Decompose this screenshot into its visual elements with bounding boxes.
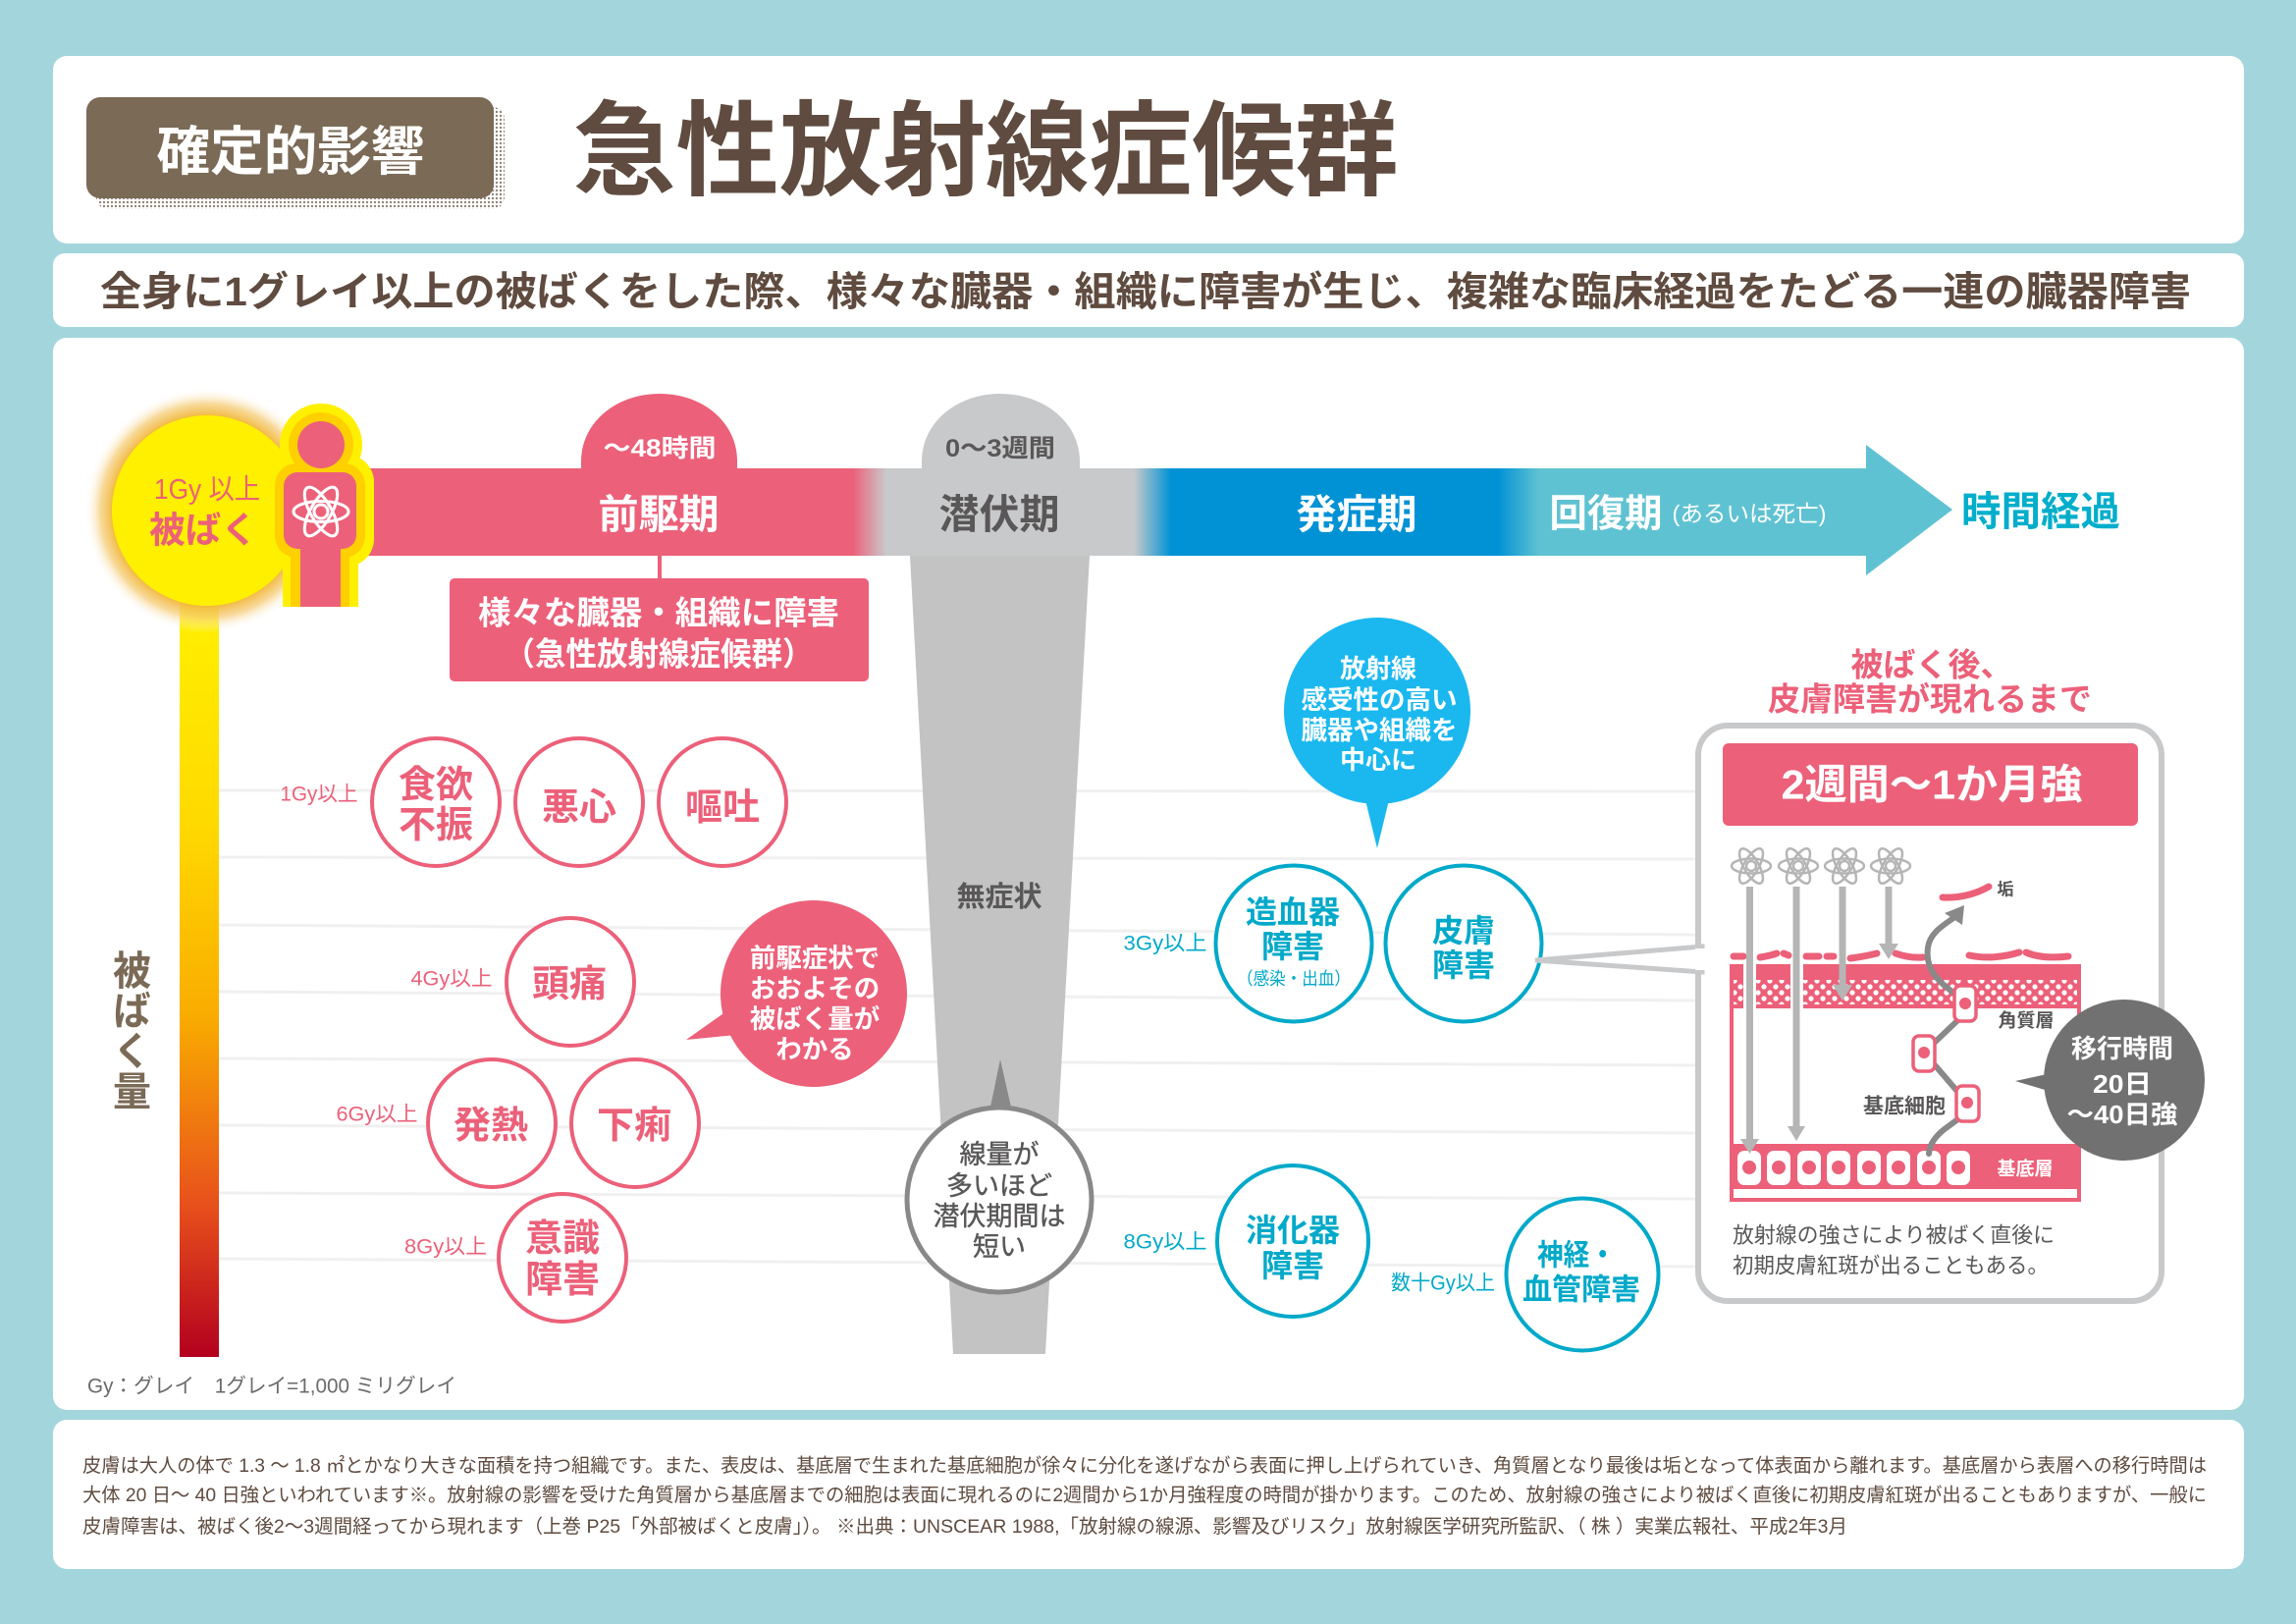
- dose label: 8Gy以上: 8Gy以上: [404, 1235, 487, 1259]
- timeline arrow: 潜伏期: [938, 492, 1060, 537]
- symptom: 嘔吐: [659, 738, 786, 866]
- dome: 0〜3週間: 0〜3週間: [945, 435, 1055, 462]
- panel: summary line: [53, 253, 2244, 327]
- symptom: 意識障害: 障害: [525, 1260, 600, 1301]
- panel: summary line: 全身に1グレイ以上の被ばくをした際、様々な臓器・組織に障害が生じ、複雑な臨床経過をたどる一連の臓器障害: [100, 269, 2191, 314]
- organ: 皮膚障害: 障害: [1432, 947, 1495, 983]
- exposure circle with glow: [84, 388, 330, 633]
- badge: 確定的影響: 確定的影響: [157, 123, 424, 182]
- speech bubble: 放射線感受性: 放射線: [1340, 654, 1416, 683]
- symptom: 意識障害: 意識: [525, 1218, 600, 1260]
- timeline arrow: (あるいは死亡): [1673, 501, 1826, 526]
- badge: 確定的影響: [86, 97, 505, 209]
- dose label: 数十Gy以上: 数十Gy以上: [1391, 1272, 1495, 1294]
- speech bubble: 線量: 多いほど: [946, 1171, 1052, 1201]
- panel: explanatory footnote: 大体 20 日～ 40 日強といわれています※。放射線の影響を受けた角質層から基底層までの細胞は表面に現れるのに2週間から1か月強程度の時間が掛かります。このため、放射線の強さにより被ばく直後に初期皮膚紅斑が出ることもありますが、一般に: [82, 1485, 2207, 1506]
- dome: 〜48時間: [581, 394, 737, 469]
- label: 基底細胞: 基底細胞: [1863, 1096, 1946, 1117]
- axis label: 被ばく量: 被ばく量: [108, 949, 151, 1110]
- arrow: cell migration path: [1924, 905, 1967, 1154]
- speech bubble: 線量: 短い: [973, 1232, 1026, 1262]
- label: 垢: 垢: [1997, 880, 2014, 899]
- speech bubble: 移行時間: 移行時間: [2071, 1034, 2173, 1063]
- latent period gray column: [910, 556, 1090, 1354]
- header: 2週間〜1か月強: 2週間〜1か月強: [1781, 762, 2083, 807]
- symptom: 嘔吐: 嘔吐: [685, 787, 760, 829]
- speech bubble: 放射線感受性: [1284, 618, 1470, 848]
- heading: 皮膚障害が現れるまで: 被ばく後、: [1851, 646, 2012, 683]
- icons: radiation atoms: [1732, 845, 1910, 887]
- symptom: 下痢: 下痢: [597, 1106, 671, 1147]
- symptom: 食欲不振: 不振: [399, 805, 473, 846]
- speech bubble: 前駆症状: 被ばく量が: [750, 1004, 880, 1034]
- symptom: 悪心: [515, 738, 643, 866]
- dose axis gradient bar: [180, 599, 219, 1357]
- symptom: 頭痛: 頭痛: [532, 964, 607, 1005]
- organ: 神経・血管障害: 神経・: [1537, 1239, 1616, 1272]
- speech bubble: 前駆症状: わかる: [775, 1035, 854, 1064]
- symptom: 悪心: 悪心: [542, 787, 616, 829]
- organ: 造血器障害: [1215, 866, 1372, 1021]
- panel: explanatory footnote: 皮膚障害は、被ばく後2～3週間経ってから現れます（上巻 P25「外部被ばくと皮膚」）。 ※出典：UNSCEAR 1988,「放射線の線源、影響及びリスク」放射線医学研究所監訳、（ 株 ）実業広報社、平成2年3月: [82, 1516, 1847, 1538]
- heading: 皮膚障害が現れるまで: [1768, 646, 2092, 717]
- panel: title: [53, 56, 2244, 244]
- note text: 放射線の強さにより被ばく直後に: [1733, 1223, 2055, 1247]
- speech bubble: 移行時間: 〜40日強: [2067, 1100, 2177, 1129]
- speech bubble: 線量: [907, 1059, 1092, 1292]
- label: 角質層: 角質層: [1998, 1009, 2055, 1031]
- timeline arrow: 発症期: [1296, 492, 1417, 537]
- callout: 様々な臓器・組織に障害: 様々な臓器・組織に障害: [478, 595, 839, 630]
- speech bubble: 前駆症状: 前駆症状で: [750, 944, 880, 973]
- label: 時間経過: 時間経過: [1961, 489, 2120, 534]
- migrating cells: [1913, 986, 1979, 1121]
- symptom: 発熱: [428, 1059, 556, 1187]
- exposure circle with glow: 被ばく: [149, 511, 257, 550]
- dose label: 6Gy以上: 6Gy以上: [336, 1104, 418, 1125]
- timeline arrow: [353, 445, 1952, 575]
- arrows: radiation penetration: [1740, 887, 1898, 1154]
- panel: explanatory footnote: 皮膚は大人の体で 1.3 ～ 1.8 ㎡とかなり大きな面積を持つ組織です。また、表皮は、基底層で生まれた基底細胞が徐々に分化を遂げながら表面に押し上げられていき、角質層となり最後は垢となって体表面から離れます。基底層から表層への移行時間は: [82, 1454, 2207, 1477]
- dome: 〜48時間: 〜48時間: [603, 435, 717, 462]
- speech bubble: 移行時間: 20日: [2093, 1069, 2152, 1099]
- symptom: 発熱: 発熱: [454, 1106, 528, 1147]
- symptom: 意識障害: [499, 1194, 626, 1322]
- speech bubble: 前駆症状: [686, 900, 907, 1087]
- callout: 様々な臓器・組織に障害: [450, 578, 869, 681]
- organ: 消化器障害: [1217, 1165, 1368, 1317]
- note text: 初期皮膚紅斑が出ることもある。: [1733, 1253, 2049, 1278]
- speech bubble: 前駆症状: おおよその: [750, 974, 880, 1003]
- organ: 神経・血管障害: 血管障害: [1522, 1274, 1640, 1306]
- label: 基底層: 基底層: [1997, 1159, 2054, 1180]
- dose label: 8Gy以上: 8Gy以上: [1123, 1231, 1207, 1253]
- dome: 0〜3週間: [922, 394, 1080, 469]
- exposure circle with glow: 1Gy 以上: [154, 474, 260, 506]
- speech bubble: 放射線感受性: 中心に: [1340, 745, 1416, 775]
- heading: 皮膚障害が現れるまで: 皮膚障害が現れるまで: [1768, 681, 2092, 717]
- organ: 消化器障害: 消化器: [1246, 1213, 1340, 1248]
- speech bubble: 放射線感受性: 臓器や組織を: [1302, 716, 1457, 745]
- organ: 造血器障害: 障害: [1261, 929, 1324, 964]
- symptom: 食欲不振: 食欲: [399, 765, 473, 806]
- dose grid lines: [219, 790, 1698, 1267]
- panel: skin diagram box: [1535, 726, 2162, 1301]
- organ: 造血器障害: 造血器: [1246, 894, 1340, 930]
- organ: 神経・血管障害: [1506, 1198, 1659, 1351]
- symptom: 下痢: [571, 1059, 699, 1187]
- callout: 様々な臓器・組織に障害: （急性放射線症候群）: [505, 636, 813, 672]
- dose label: 4Gy以上: 4Gy以上: [410, 968, 493, 990]
- organ: 造血器障害: （感染・出血）: [1237, 969, 1351, 989]
- basal cells: [1737, 1151, 1970, 1185]
- icon: irradiated person: [266, 404, 374, 607]
- flaking cells: [1734, 887, 2068, 958]
- organ: 消化器障害: 障害: [1261, 1248, 1324, 1283]
- speech bubble: 放射線感受性: 感受性の高い: [1302, 685, 1457, 715]
- label: 無症状: 無症状: [956, 881, 1042, 913]
- panel: explanatory footnote: [53, 1420, 2244, 1569]
- dose label: 3Gy以上: 3Gy以上: [1123, 933, 1207, 954]
- timeline arrow: 前駆期: [599, 492, 719, 537]
- connector wedge: [1535, 947, 1707, 972]
- panel: main chart: [53, 338, 2244, 1410]
- symptom: 頭痛: [507, 918, 634, 1046]
- speech bubble: 線量: 潜伏期間は: [933, 1202, 1066, 1231]
- timeline arrow: 回復期: [1549, 493, 1663, 536]
- title: 急性放射線症候群: [573, 94, 1398, 210]
- speech bubble: 移行時間: [2015, 1000, 2205, 1161]
- skin layers: [1730, 887, 2081, 1202]
- speech bubble: 線量: 線量が: [960, 1140, 1039, 1169]
- connector to callout box: [658, 556, 662, 579]
- dose label: 1Gy以上: 1Gy以上: [281, 784, 357, 805]
- unit note: Gy：グレイ 1グレイ=1,000 ミリグレイ: [87, 1375, 456, 1398]
- organ: 皮膚障害: 皮膚: [1432, 913, 1495, 948]
- note text: [1733, 1223, 2055, 1278]
- symptom: 食欲不振: [372, 738, 500, 866]
- organ: 皮膚障害: [1386, 866, 1541, 1021]
- header: 2週間〜1か月強: [1723, 743, 2138, 826]
